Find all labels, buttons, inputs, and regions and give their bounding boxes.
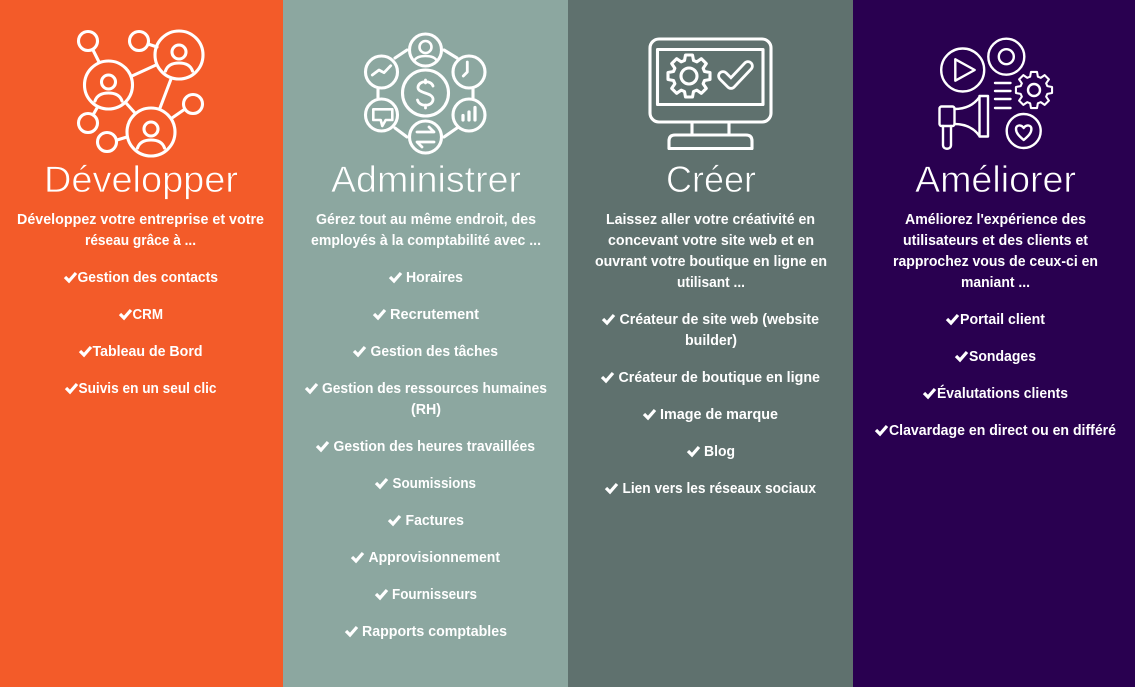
heading: Développer: Développer xyxy=(44,159,238,200)
list item: Gestion des ressources humaines (RH): (RH) xyxy=(411,402,441,418)
intro text: rapprochez vous de ceux-ci en xyxy=(893,254,1098,270)
icon: monitor with gear and check xyxy=(650,39,771,148)
list item: Tableau de Bord: Tableau de Bord xyxy=(92,344,202,360)
intro text: Gérez tout au même endroit, des xyxy=(316,212,536,228)
panel: Développer xyxy=(0,0,283,687)
icon: management hub xyxy=(366,34,485,153)
list item: Horaires: Horaires xyxy=(406,270,463,286)
panel: Améliorer xyxy=(853,0,1135,687)
list item: Créateur de site web: builder) xyxy=(685,333,737,349)
intro text: Laissez aller votre créativité en xyxy=(606,212,815,228)
list item: Clavardage en direct ou en différé: Clavardage en direct ou en différé xyxy=(889,423,1116,439)
list item: Gestion des contacts: Gestion des contacts xyxy=(78,270,218,286)
list item: Image de marque: Image de marque xyxy=(660,407,778,423)
list item: Factures: Factures xyxy=(406,513,464,529)
intro text: utilisant ... xyxy=(677,275,745,291)
list item: Gestion des tâches: Gestion des tâches xyxy=(370,344,498,360)
list item: Gestion des ressources humaines (RH) xyxy=(306,381,547,418)
list item: Sondages: Sondages xyxy=(969,349,1036,365)
list item: Portail client: Portail client xyxy=(960,312,1045,328)
intro text: Développez votre entreprise et votre xyxy=(17,212,264,228)
intro text xyxy=(595,212,827,291)
list item: Gestion des heures travaillées: Gestion des heures travaillées xyxy=(334,439,535,455)
list item: Lien vers les réseaux sociaux: Lien vers les réseaux sociaux xyxy=(622,481,816,497)
icon: people network xyxy=(78,31,203,156)
list item: Créateur de boutique en ligne: Créateur de boutique en ligne xyxy=(618,370,820,386)
intro text xyxy=(893,212,1098,291)
list item: Suivis en un seul clic: Suivis en un seul clic xyxy=(78,381,216,397)
panel: Créer xyxy=(568,0,853,687)
intro text: réseau grâce à ... xyxy=(85,233,196,249)
intro text: utilisateurs et des clients et xyxy=(903,233,1088,249)
intro text xyxy=(17,212,264,249)
intro text: Améliorez l'expérience des xyxy=(905,212,1086,228)
intro text xyxy=(311,212,541,249)
list item: Rapports comptables: Rapports comptables xyxy=(362,624,507,640)
icon: marketing megaphone xyxy=(940,39,1052,149)
list item: Blog xyxy=(688,444,735,460)
list item: Évalutations clients: Évalutations clients xyxy=(937,385,1068,402)
intro text: maniant ... xyxy=(961,275,1030,291)
heading: Créer: Créer xyxy=(666,159,756,200)
list item: CRM xyxy=(120,307,163,323)
list item: Blog: Blog xyxy=(704,444,735,460)
list item: Créateur de site web xyxy=(603,312,819,349)
panel: Administrer xyxy=(283,0,568,687)
list item: Soumissions: Soumissions xyxy=(392,476,476,492)
list item: Gestion des ressources humaines (RH): Gestion des ressources humaines xyxy=(322,381,547,397)
intro text: ouvrant votre boutique en ligne en xyxy=(595,254,827,270)
list item: Recrutement: Recrutement xyxy=(390,307,479,323)
list item: Créateur de site web: Créateur de site web (website xyxy=(620,312,819,328)
intro text: concevant votre site web et en xyxy=(608,233,814,249)
list item: CRM: CRM xyxy=(132,307,163,323)
list item: Approvisionnement: Approvisionnement xyxy=(368,550,500,566)
heading: Améliorer: Améliorer xyxy=(915,159,1076,200)
list item: Fournisseurs: Fournisseurs xyxy=(392,587,477,603)
intro text: employés à la comptabilité avec ... xyxy=(311,233,541,249)
heading: Administrer: Administrer xyxy=(331,159,521,200)
